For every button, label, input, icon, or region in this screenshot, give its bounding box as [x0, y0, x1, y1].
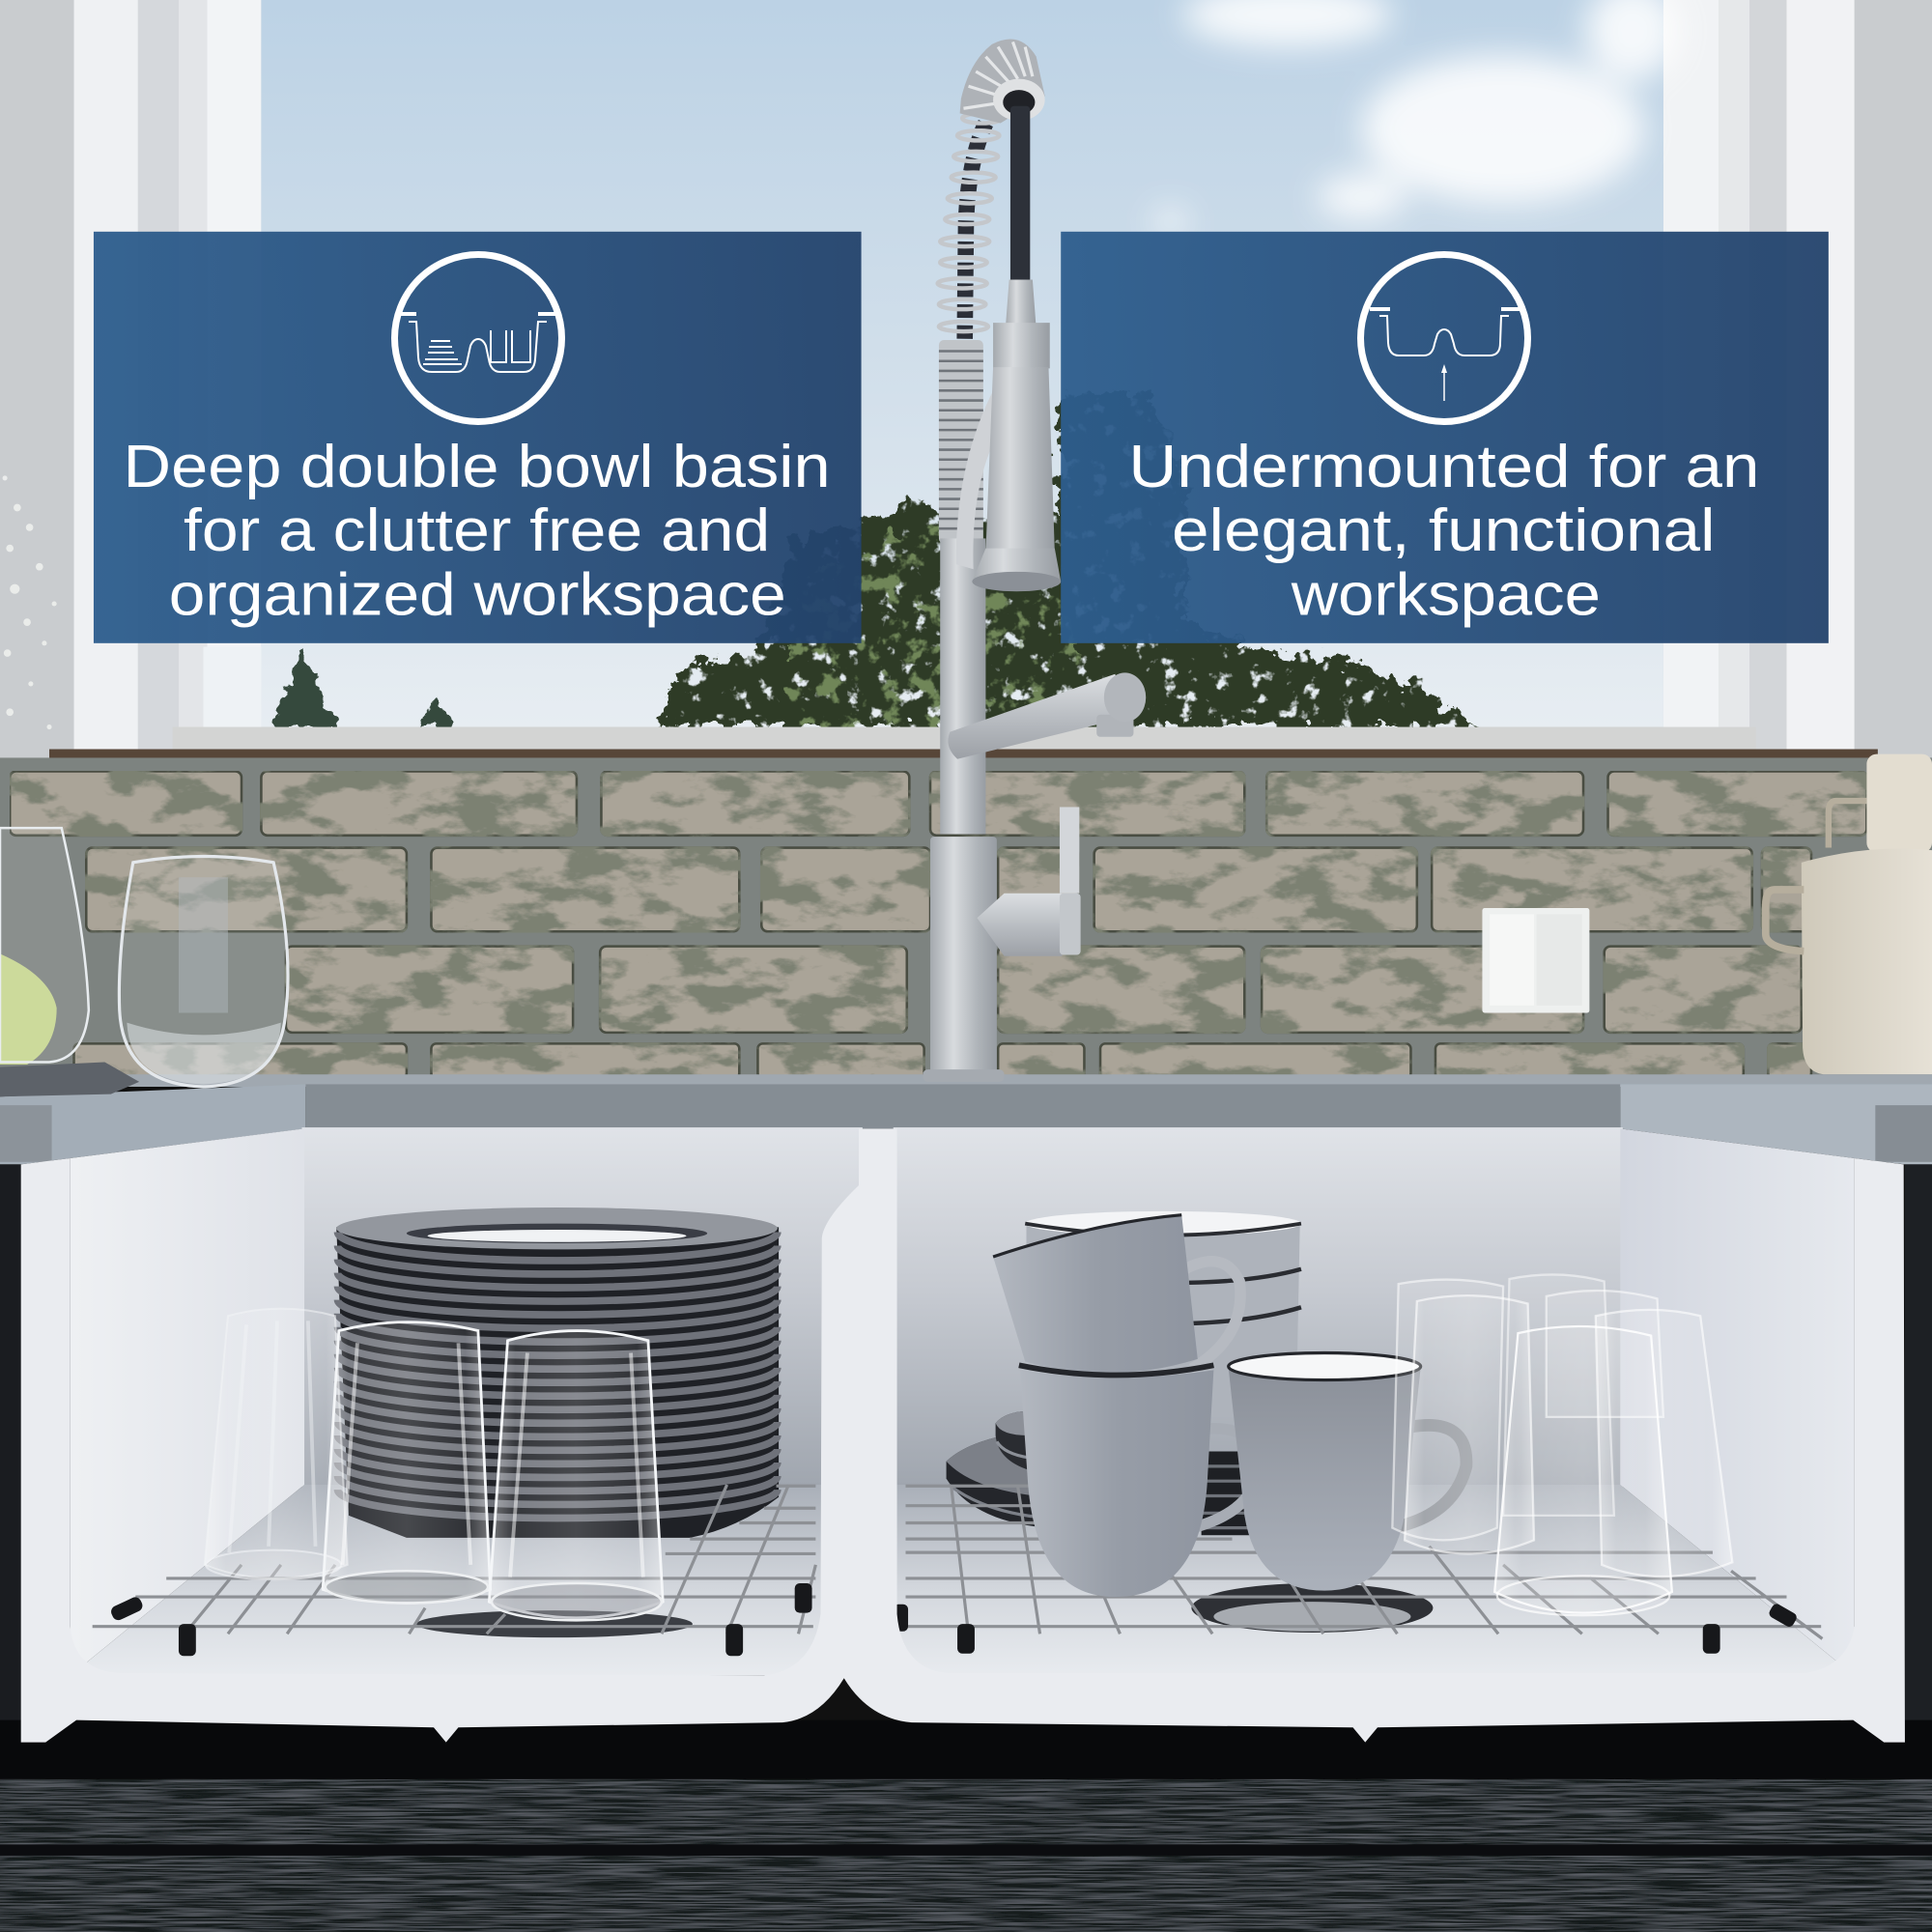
- faucet flange: [923, 1069, 1005, 1082]
- plate stack, left bowl: [336, 1208, 779, 1538]
- faucet spray head: [972, 280, 1061, 591]
- background wall and window frame: [0, 0, 1932, 788]
- towel: [0, 1062, 139, 1096]
- window sill: [173, 727, 1756, 750]
- panel: undermounted workspace: [1061, 232, 1829, 643]
- sink basin interior: [71, 1127, 1855, 1676]
- spring dome: [960, 40, 1045, 124]
- icon: double bowl basin with dishes: [394, 255, 562, 421]
- upper tilted mug: [993, 1215, 1240, 1374]
- glass one, left bowl: [205, 1309, 348, 1579]
- glass three, left bowl: [489, 1331, 663, 1620]
- faucet base: [930, 837, 997, 1073]
- trees outside window: [273, 394, 1479, 727]
- glasses group, right bowl: [1392, 1274, 1732, 1615]
- grid feet, right bowl: [894, 1603, 1799, 1654]
- text: basin description: [124, 433, 831, 628]
- faucet spout: [948, 672, 1146, 759]
- drain discs: [416, 1583, 1433, 1637]
- sink cut-away front face: [21, 1128, 1905, 1743]
- text: basin description: Deep double bowl basin: [124, 433, 831, 500]
- wall switch: [1482, 908, 1589, 1012]
- text: undermount description: [1128, 433, 1759, 628]
- faucet spray arm: [956, 393, 993, 569]
- faucet handle: [977, 807, 1081, 956]
- cream pot and cup at right: [1766, 754, 1932, 1074]
- text: undermount description: Undermounted for an: [1128, 433, 1759, 500]
- faucet pull-down hose: [1010, 106, 1030, 283]
- faucet: [923, 40, 1146, 1082]
- wood ledge: [49, 750, 1878, 766]
- dried flowers at left: [3, 475, 57, 729]
- faucet dense coil spring: [939, 340, 983, 543]
- drinking glass with lime on counter: [0, 828, 89, 1065]
- text: basin description: for a clutter free and: [184, 497, 770, 564]
- text: undermount description: workspace: [1291, 560, 1601, 628]
- wire grid, right bowl: [894, 1486, 1822, 1638]
- stacked bowls, right bowl: [1025, 1211, 1301, 1417]
- text: basin description: organized workspace: [169, 560, 786, 628]
- glass two, left bowl: [323, 1322, 491, 1603]
- window sky view: [203, 0, 1680, 727]
- right front mug: [1229, 1353, 1466, 1591]
- grid feet, left bowl: [109, 1583, 812, 1656]
- faucet open spring and inner hose: [938, 40, 1045, 339]
- text: undermount description: elegant, functional: [1172, 497, 1716, 564]
- small plate stack, right bowl: [947, 1410, 1257, 1535]
- faucet upper column: [940, 538, 985, 835]
- counter top and rear sink lip: [0, 1074, 1932, 1164]
- cabinets and dark base: [0, 1164, 1932, 1932]
- wire grid, left bowl: [93, 1485, 815, 1634]
- clouds: [1153, 0, 1680, 234]
- panel: deep double bowl basin: [94, 232, 862, 643]
- brick backsplash: [0, 757, 1932, 1081]
- lower front mug: [1019, 1365, 1260, 1597]
- stemless wine glass on counter: [119, 856, 288, 1087]
- icon: undermount profile with arrow: [1360, 255, 1528, 421]
